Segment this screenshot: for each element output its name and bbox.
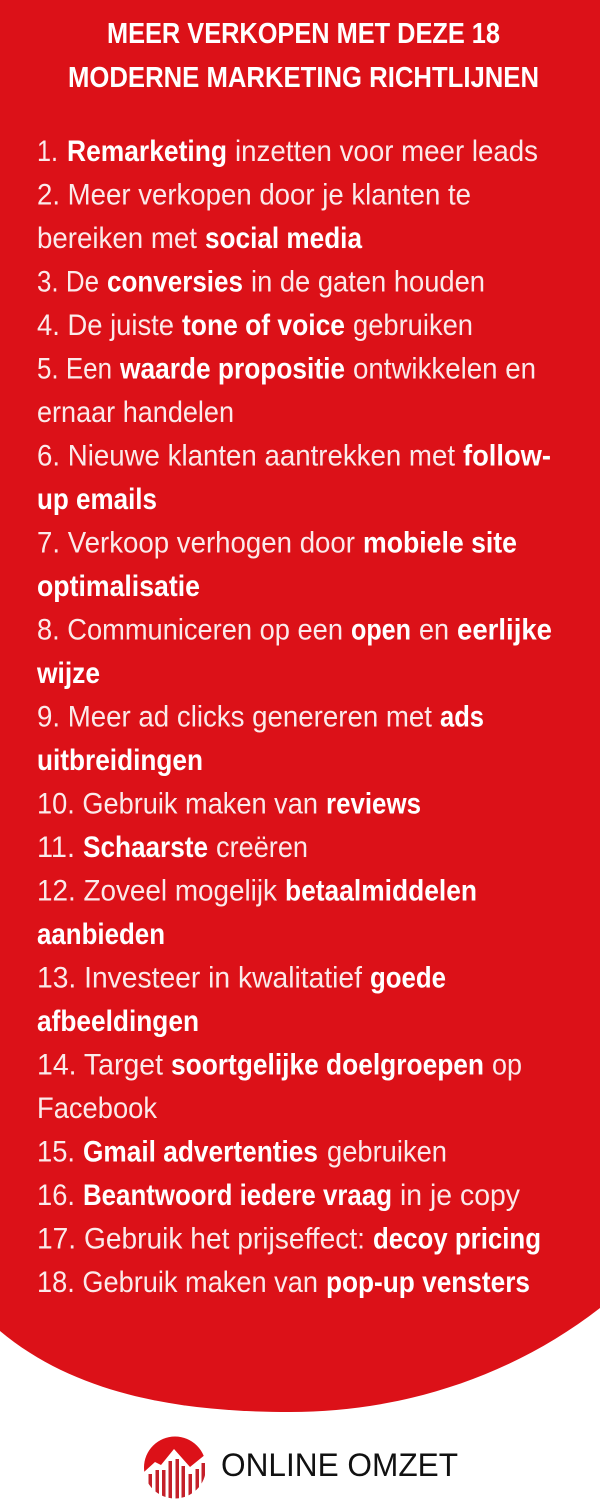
title: MEER VERKOPEN MET DEZE 18 [107, 18, 500, 50]
item 5 [37, 352, 536, 429]
item 1: Remarketing [67, 135, 227, 168]
item 10: 10. Gebruik maken van [37, 788, 318, 820]
item 9: 9. Meer ad clicks genereren met [37, 700, 433, 734]
item 4: 4. De juiste [37, 309, 174, 342]
item 12: aanbieden [37, 918, 165, 951]
item 3: in de gaten houden [251, 266, 485, 298]
item 7: optimalisatie [37, 570, 200, 603]
item 12: betaalmiddelen [285, 874, 477, 908]
title: MODERNE MARKETING RICHTLIJNEN [68, 62, 539, 94]
item 12: 12. Zoveel mogelijk [37, 874, 278, 908]
item 9: uitbreidingen [37, 744, 203, 777]
item 5: ernaar handelen [37, 396, 234, 429]
item 11: Schaarste [83, 831, 208, 864]
item 3: conversies [107, 266, 243, 298]
item 14: soortgelijke doelgroepen [171, 1048, 484, 1082]
item 16: Beantwoord iedere vraag [83, 1179, 392, 1212]
item 3: 3. De [37, 266, 99, 298]
item 15: 15. [37, 1136, 75, 1168]
item 11: creëren [216, 831, 308, 864]
item 15: Gmail advertenties [83, 1136, 318, 1168]
item 9: ads [440, 700, 484, 734]
item 2: 2. Meer verkopen door je klanten te [37, 178, 471, 212]
item 4: tone of voice [182, 309, 345, 342]
item 10: reviews [326, 788, 421, 820]
item 7 [37, 526, 517, 603]
item 8: eerlijke [457, 614, 552, 646]
item 8: open [351, 614, 411, 646]
list of 18 guidelines [36, 135, 552, 1299]
item 17 [37, 1222, 541, 1256]
icon: circle with mountain chart [144, 1435, 206, 1500]
item 8 [36, 614, 552, 690]
item 2 [37, 178, 471, 255]
item 5: 5. Een [37, 352, 112, 386]
item 13: 13. Investeer in kwalitatief [37, 962, 363, 994]
item 13 [37, 962, 446, 1038]
item 8: wijze [36, 657, 100, 690]
item 6: 6. Nieuwe klanten aantrekken met [37, 440, 456, 472]
item 14: Facebook [37, 1092, 158, 1125]
logo: Online Omzet [144, 1435, 458, 1500]
item 5: waarde propositie [119, 352, 345, 386]
item 4 [37, 309, 473, 342]
item 15: gebruiken [327, 1136, 447, 1168]
title [68, 18, 539, 94]
item 16: 16. [37, 1179, 75, 1212]
item 1: 1. [37, 135, 58, 168]
item 3 [37, 266, 485, 298]
item 9 [37, 700, 484, 777]
item 18: pop-up vensters [326, 1266, 530, 1299]
item 1 [37, 135, 538, 168]
item 16: in je copy [400, 1179, 520, 1212]
item 17: decoy pricing [373, 1222, 541, 1256]
item 13: afbeeldingen [37, 1005, 199, 1038]
item 18 [37, 1266, 530, 1299]
item 14: op [492, 1048, 522, 1082]
item 7: mobiele site [363, 526, 517, 560]
item 2: bereiken met [37, 222, 198, 255]
item 14: 14. Target [37, 1048, 164, 1082]
logo wordmark: ONLINE OMZET [221, 1447, 458, 1483]
item 17: 17. Gebruik het prijseffect: [37, 1222, 365, 1256]
item 12 [37, 874, 477, 951]
item 6 [37, 440, 551, 516]
item 2: social media [205, 222, 362, 255]
item 11 [37, 831, 308, 864]
item 6: up emails [37, 483, 157, 516]
item 18: 18. Gebruik maken van [37, 1266, 318, 1299]
item 8: 8. Communiceren op een [37, 614, 343, 646]
item 13: goede [370, 962, 446, 994]
item 1: inzetten voor meer leads [235, 135, 538, 168]
item 15 [37, 1136, 447, 1168]
item 14 [37, 1048, 522, 1125]
item 5: ontwikkelen en [353, 352, 536, 386]
item 8: en [419, 614, 449, 646]
item 4: gebruiken [353, 309, 473, 342]
item 7: 7. Verkoop verhogen door [37, 526, 355, 560]
item 6: follow- [463, 440, 551, 472]
item 11: 11. [37, 831, 75, 864]
